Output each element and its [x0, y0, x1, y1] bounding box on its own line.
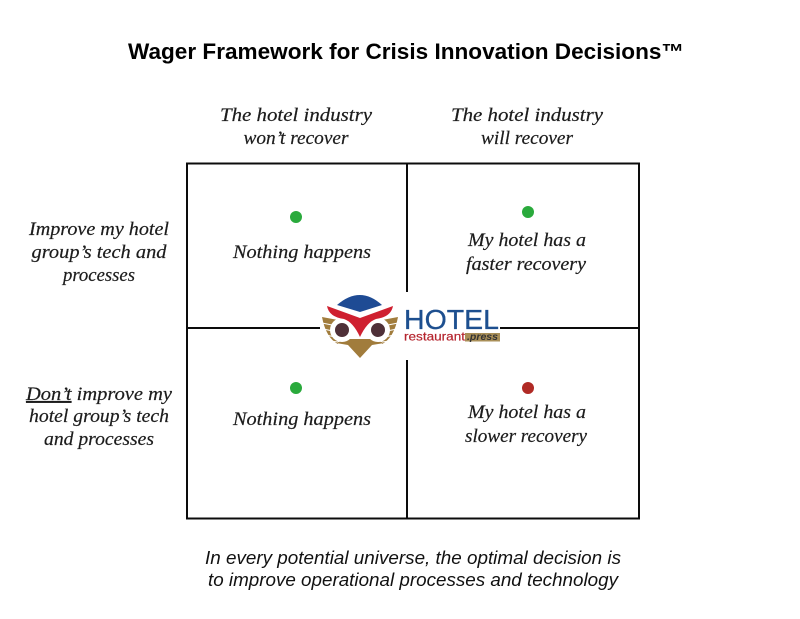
title: Wager Framework for Crisis Innovation Decisions™: [128, 39, 684, 64]
column header: will recover: [451, 105, 604, 149]
quadrant: bottom left: Nothing happens: [232, 409, 371, 430]
quadrant: bottom right: My hotel has a: [467, 402, 586, 423]
column header: will recover: will recover: [481, 128, 574, 149]
row header: improve: group’s tech and: [32, 242, 167, 263]
column header: will recover: The hotel industry: [451, 105, 604, 126]
footer conclusion: to improve operational processes and technology: [208, 570, 619, 590]
column header: won't recover: won’t recover: [244, 128, 349, 149]
icon: owl: [322, 295, 398, 358]
row header: don't improve: [25, 384, 173, 450]
row header: don't improve: and processes: [44, 429, 154, 450]
row header: don't improve: hotel group’s tech: [29, 406, 169, 427]
column header: won't recover: The hotel industry: [220, 105, 373, 126]
quadrant: bottom right: slower recovery: [465, 426, 588, 447]
footer conclusion: [205, 548, 621, 590]
quadrant: top right: [466, 206, 587, 275]
logo tagline: .press: [467, 332, 498, 343]
logo tagline: restaurant: [404, 332, 466, 344]
quadrant: bottom left: [232, 382, 371, 430]
row header: improve: [28, 219, 169, 286]
logo: [320, 292, 500, 360]
row header: don't improve: Don’t improve my: [25, 384, 173, 405]
logo tagline: [404, 332, 500, 344]
logo wordmark: HOTEL: [404, 304, 499, 335]
row header: improve: Improve my hotel: [28, 219, 169, 240]
row header: improve: processes: [61, 265, 135, 286]
column header: won't recover: [220, 105, 373, 149]
quadrant: top left: [232, 211, 371, 263]
quadrant: top left: Nothing happens: [232, 242, 371, 263]
quadrant: bottom right: [465, 382, 588, 447]
footer conclusion: In every potential universe, the optimal decision is: [205, 548, 621, 568]
matrix grid: [187, 163, 639, 519]
quadrant: top right: My hotel has a: [467, 230, 586, 251]
quadrant: top right: faster recovery: [466, 254, 587, 275]
